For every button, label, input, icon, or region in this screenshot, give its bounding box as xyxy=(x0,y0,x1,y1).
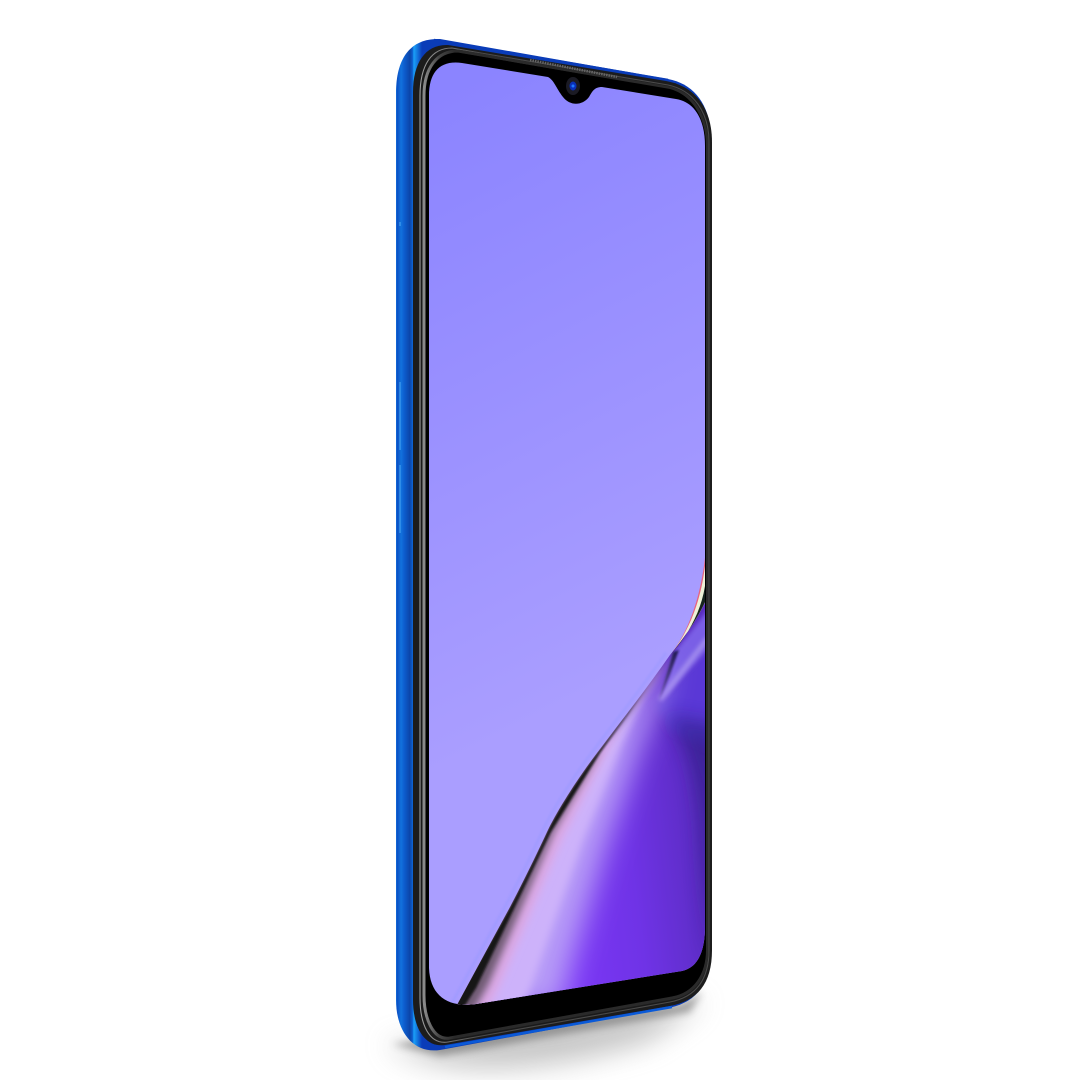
grey inner rim xyxy=(424,51,707,1038)
grey band xyxy=(450,655,670,1010)
floor shadow xyxy=(385,992,705,1068)
purple fold xyxy=(458,603,705,1005)
phone body: blue frame xyxy=(396,39,711,1050)
bottom edge strip xyxy=(445,1007,672,1047)
wallpaper swoosh xyxy=(458,603,705,1005)
lavender band xyxy=(458,668,662,1005)
side buttons xyxy=(399,222,401,533)
red sliver xyxy=(672,558,705,652)
rainbow fold xyxy=(671,558,705,654)
speaker grille xyxy=(530,60,617,77)
camera housing xyxy=(566,77,580,95)
volume up button xyxy=(399,382,401,450)
phone illustration xyxy=(389,38,712,1080)
dark sliver xyxy=(672,586,705,654)
shading under the ray xyxy=(664,653,705,741)
lens glint xyxy=(572,84,574,88)
camera xyxy=(566,77,580,95)
upper fold shading xyxy=(665,610,705,694)
top edge strip xyxy=(434,40,668,80)
upper lavender ray xyxy=(660,638,708,700)
lavender glow xyxy=(450,655,670,1010)
black edge xyxy=(458,689,646,1005)
blue edge glow xyxy=(452,653,666,1003)
dark streak xyxy=(659,650,679,700)
pink band xyxy=(458,674,658,1005)
bezel: dark frame xyxy=(413,45,712,1045)
silver rim line xyxy=(420,48,709,1042)
sensor dot xyxy=(399,222,401,226)
volume down button xyxy=(399,465,401,533)
dark right shading xyxy=(664,710,705,930)
inner black glass xyxy=(427,53,706,1036)
white sliver xyxy=(674,566,705,650)
wallpaper base xyxy=(425,55,710,1015)
camera lens xyxy=(570,82,576,90)
screen wallpaper xyxy=(425,55,722,1020)
